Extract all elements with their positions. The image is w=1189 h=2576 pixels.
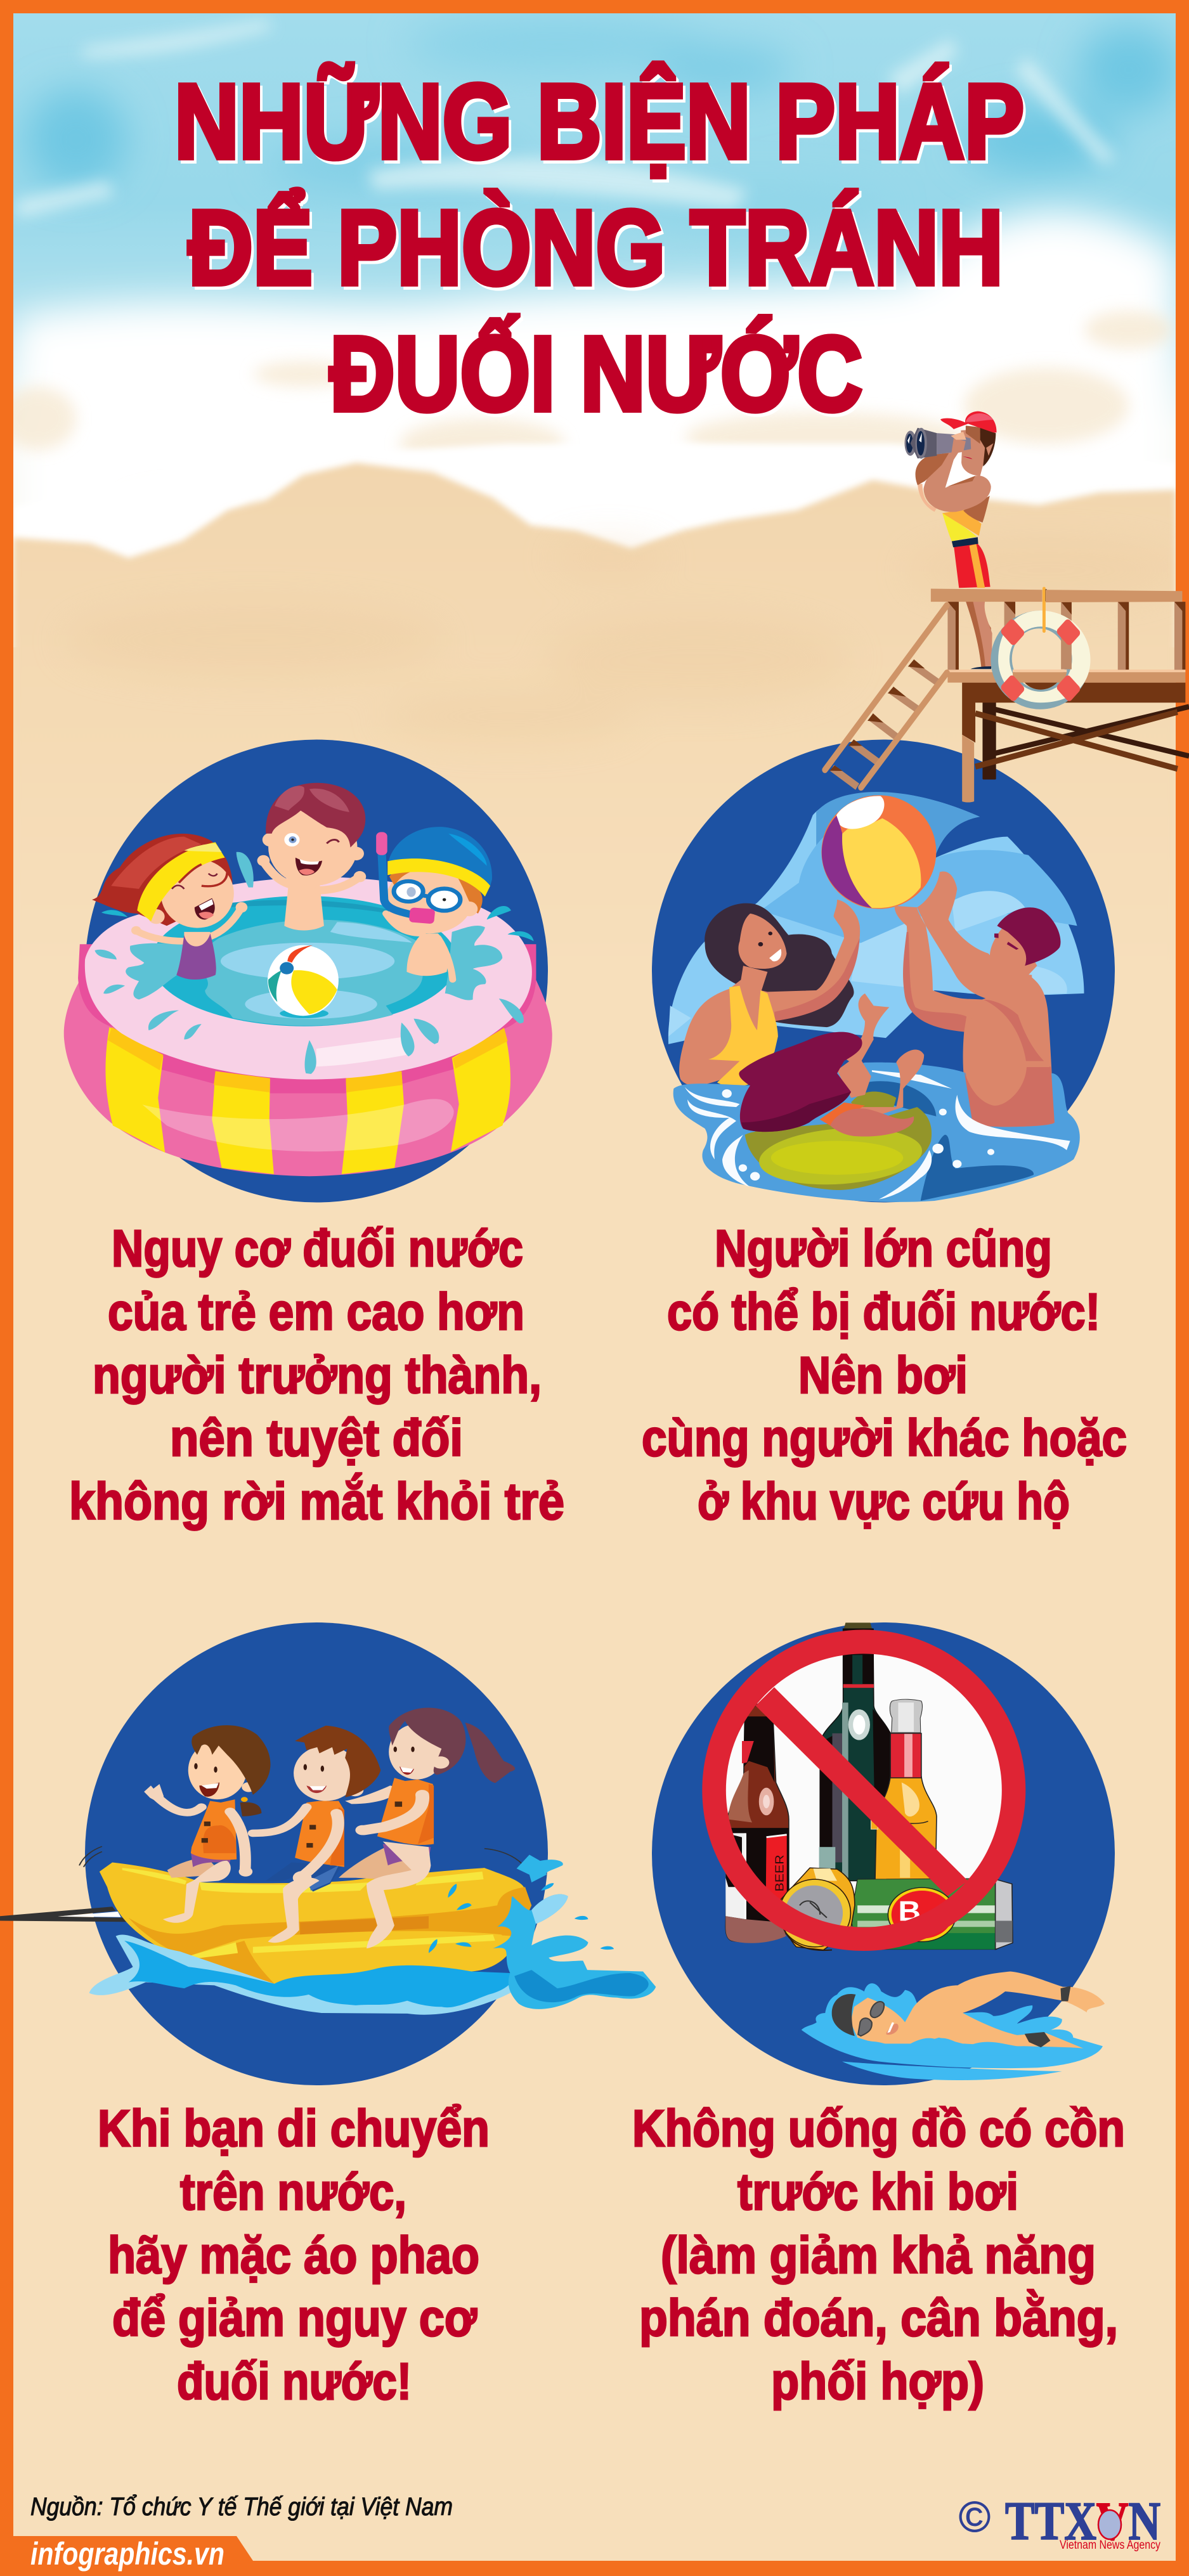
child: rear girl — [465, 1723, 515, 1783]
swimmer — [802, 1972, 1105, 2080]
child: centre boy — [284, 884, 324, 930]
beach ball — [821, 795, 936, 909]
white sign background — [714, 1640, 1013, 1941]
lifeguard figure — [916, 411, 996, 669]
title: ĐUỐI NƯỚC — [330, 315, 862, 433]
text block: panel 1: nên tuyệt đối — [170, 1409, 463, 1467]
cans: B — [898, 1895, 921, 1927]
water splash — [89, 1935, 519, 2015]
text block: panel 1: không rời mắt khỏi trẻ — [69, 1473, 564, 1531]
text block: panel 4: (làm giảm khả năng — [661, 2227, 1096, 2284]
pool water — [151, 896, 457, 1026]
child: girl with headband — [92, 834, 232, 926]
text block: panel 3: đuối nước! — [177, 2353, 412, 2411]
text block: panel 3: trên nước, — [180, 2163, 406, 2221]
tower: railing posts — [947, 602, 1185, 670]
text block: panel 3: để giảm nguy cơ — [112, 2289, 478, 2347]
prohibition sign — [702, 1630, 1025, 1951]
tow rope — [0, 1906, 148, 1922]
text block: panel 1 — [69, 1220, 564, 1531]
text block: panel 3 — [98, 2100, 490, 2411]
text block: panel 3: hãy mặc áo phao — [108, 2227, 479, 2284]
tower: ladder — [825, 605, 947, 787]
title: NHỮNG BIỆN PHÁP — [174, 63, 1024, 181]
splashes and drops — [126, 943, 184, 1000]
text block: panel 3: Khi bạn di chuyển — [98, 2100, 490, 2158]
cans — [779, 1868, 1013, 1950]
beach ball — [280, 1009, 328, 1018]
child on inner tube — [844, 994, 889, 1067]
source note: Nguồn: Tổ chức Y tế Thế giới tại Việt Nam — [30, 2493, 453, 2521]
tower: top rail — [931, 589, 1182, 602]
panel 3 illustration: children on banana boat — [0, 1622, 656, 2085]
text block: panel 2: có thể bị đuối nước! — [667, 1283, 1100, 1341]
logo: TTXVN: TTXVN — [1005, 2490, 1160, 2551]
text block: panel 1: người trưởng thành, — [93, 1347, 542, 1404]
man with maroon cap — [963, 975, 1055, 1127]
text block: panel 2: ở khu vực cứu hộ — [698, 1473, 1070, 1531]
child: front girl — [167, 1856, 223, 1878]
bottle: orange beer — [871, 1699, 937, 1881]
text block: panel 4: phán đoán, cân bằng, — [639, 2289, 1118, 2347]
white foam edge — [119, 441, 925, 546]
binoculars — [904, 428, 971, 459]
sand edge — [13, 459, 1176, 662]
text block: panel 2: cùng người khác hoặc — [642, 1409, 1127, 1467]
text block: panel 2 — [642, 1220, 1127, 1531]
panel 2 illustration: adults playing with beach ball — [652, 739, 1115, 1202]
logo: TTXVN: © — [959, 2493, 991, 2541]
text block: panel 2: Người lớn cũng — [715, 1220, 1052, 1278]
woman with dark hair — [705, 903, 854, 1027]
bottle: brown beer: BEER — [773, 1854, 786, 1892]
inner tube — [745, 1107, 932, 1190]
title: ĐỂ PHÒNG TRÁNH — [188, 189, 1003, 307]
text block: panel 4: trước khi bơi — [737, 2163, 1018, 2221]
text block: panel 4 — [632, 2100, 1125, 2411]
tower: deck — [962, 683, 1185, 742]
tower: rear legs and braces — [982, 700, 996, 779]
panel 1 illustration: children in inflatable pool — [64, 739, 552, 1202]
child: middle boy — [266, 1862, 342, 1892]
text block: panel 4: Không uống đồ có cồn — [632, 2100, 1125, 2158]
child: boy with snorkel — [406, 933, 448, 976]
title — [174, 63, 1024, 433]
life ring — [991, 587, 1090, 709]
logo: TTXVN: Vietnam News Agency — [1060, 2539, 1160, 2552]
water — [673, 1063, 1080, 1202]
text block: panel 4: phối hợp) — [771, 2353, 984, 2411]
bottle: brown beer — [725, 1704, 789, 1943]
lifeguard tower with lifeguard — [825, 411, 1189, 803]
website label: infographics.vn — [30, 2536, 224, 2572]
background: sea and foam photo — [13, 13, 1176, 754]
text block: panel 1: của trẻ em cao hơn — [108, 1283, 524, 1341]
panel 4 illustration: no alcohol before swimming — [652, 1622, 1115, 2085]
bottle: dark green wine — [819, 1622, 892, 1881]
banana boat — [100, 1862, 531, 1984]
text block: panel 2: Nên bơi — [798, 1347, 968, 1404]
text block: panel 1: Nguy cơ đuối nước — [112, 1220, 523, 1278]
